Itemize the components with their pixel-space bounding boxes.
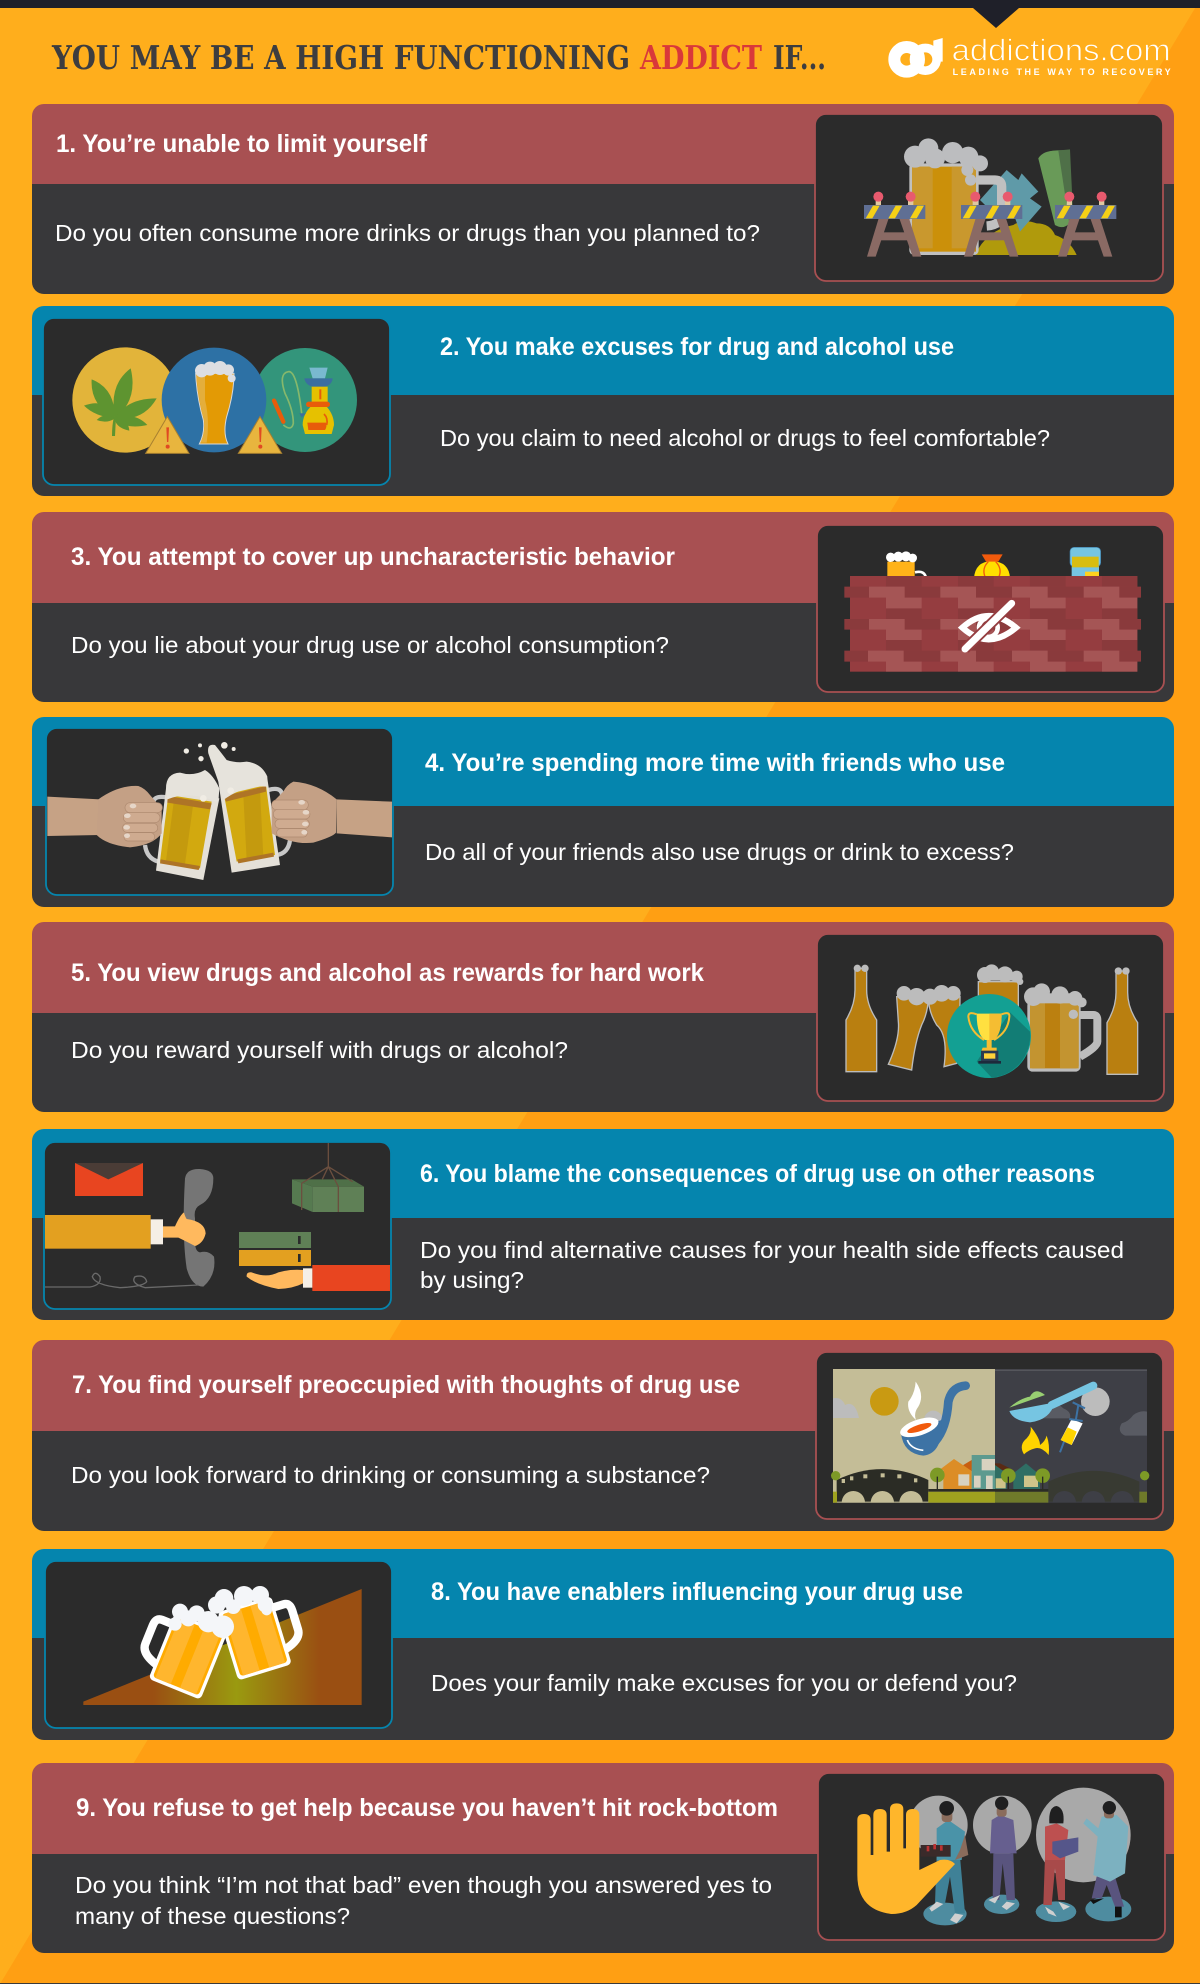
heading: 4. You’re spending more time with friends who use <box>425 749 1005 777</box>
heading: 3. You attempt to cover up uncharacteristic behavior <box>71 543 675 571</box>
header band <box>32 717 1174 806</box>
panel 9 <box>32 1763 1174 1953</box>
title: ADDICT <box>639 38 762 77</box>
image frame <box>818 1773 1165 1940</box>
question <box>75 1872 772 1929</box>
header band <box>32 104 1174 184</box>
bottom rule <box>0 1983 1200 1984</box>
question: Do you look forward to drinking or consuming a substance? <box>71 1462 710 1488</box>
illustration: day and night town with pipe and syringe <box>831 1369 1149 1503</box>
body band <box>32 184 1174 294</box>
panel 8 <box>32 1549 1174 1740</box>
image frame <box>815 114 1163 281</box>
header band <box>32 1129 1174 1218</box>
illustration: substances hidden behind brick wall <box>844 547 1141 672</box>
question: Do all of your friends also use drugs or drink to excess? <box>425 839 1014 865</box>
header band <box>32 1763 1174 1854</box>
image frame <box>45 1561 392 1728</box>
heading: 8. You have enablers influencing your drug use <box>431 1578 963 1606</box>
body band <box>32 1854 1174 1953</box>
question: Do you think “I’m not that bad” even though you answered yes to <box>75 1872 772 1898</box>
illustration: stop hand and medical staff <box>857 1788 1131 1925</box>
question: Does your family make excuses for you or defend you? <box>431 1670 1017 1696</box>
body band <box>32 1013 1174 1112</box>
heading: 5. You view drugs and alcohol as rewards for hard work <box>71 959 704 987</box>
body band <box>32 1431 1174 1531</box>
panel 7 <box>32 1340 1174 1531</box>
illustration: toasting mugs over slope <box>83 1586 362 1705</box>
image frame <box>44 1142 391 1309</box>
heading: 2. You make excuses for drug and alcohol use <box>440 333 954 361</box>
panel 6 <box>32 1129 1174 1320</box>
logo: addictions.com <box>894 33 1171 77</box>
illustration: two fists toasting beer mugs <box>47 742 392 880</box>
question: Do you often consume more drinks or drugs than you planned to? <box>55 220 760 246</box>
question <box>420 1237 1124 1293</box>
header band <box>32 306 1174 395</box>
panel 5 <box>32 922 1174 1112</box>
header band <box>32 1549 1174 1638</box>
question: Do you find alternative causes for your health side effects caused <box>420 1237 1124 1263</box>
illustration: excuses, phone, parcel and books <box>45 1143 390 1291</box>
logo: addictions.com: LEADING THE WAY TO RECOVERY <box>953 67 1171 77</box>
panel 3 <box>32 512 1174 702</box>
header band <box>32 512 1174 603</box>
top bar with notch <box>0 0 1200 28</box>
title: IF... <box>773 38 826 77</box>
heading: 6. You blame the consequences of drug use on other reasons <box>420 1160 1095 1188</box>
image frame <box>817 934 1164 1101</box>
title: YOU MAY BE A HIGH FUNCTIONING <box>51 38 630 77</box>
image frame <box>817 525 1164 692</box>
body band <box>32 1218 1174 1320</box>
image frame <box>43 318 390 485</box>
panel 4 <box>32 717 1174 907</box>
header band <box>32 922 1174 1013</box>
question: by using? <box>420 1267 524 1293</box>
question: Do you lie about your drug use or alcohol consumption? <box>71 632 669 658</box>
header band <box>32 1340 1174 1431</box>
logo: addictions.com: addictions.com <box>952 33 1171 67</box>
illustration: mug and drugs behind barricades <box>864 138 1116 257</box>
question: Do you reward yourself with drugs or alcohol? <box>71 1037 568 1063</box>
heading: 1. You’re unable to limit yourself <box>56 130 428 158</box>
image frame <box>46 728 393 895</box>
illustration: bottles and beers around trophy <box>846 964 1138 1078</box>
heading: 7. You find yourself preoccupied with thoughts of drug use <box>72 1371 740 1399</box>
image frame <box>816 1352 1163 1519</box>
body band <box>32 806 1174 907</box>
body band <box>32 603 1174 702</box>
body band <box>32 395 1174 496</box>
question: many of these questions? <box>75 1903 350 1929</box>
heading: 9. You refuse to get help because you haven’t hit rock-bottom <box>76 1794 778 1822</box>
panel 1 <box>32 104 1174 294</box>
body band <box>32 1638 1174 1740</box>
question: Do you claim to need alcohol or drugs to feel comfortable? <box>440 425 1050 451</box>
panel 2 <box>32 306 1174 496</box>
illustration: cannabis, beer and hookah with warnings <box>72 347 357 453</box>
